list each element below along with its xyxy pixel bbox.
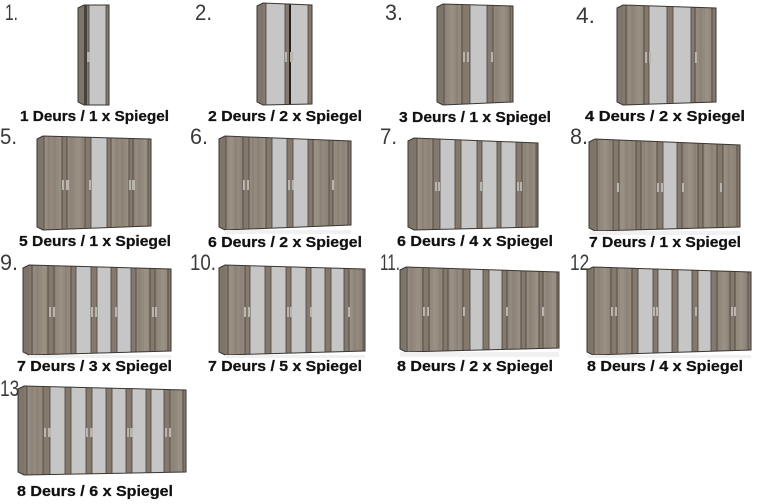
- icon: wardrobe 7 doors, 3 mirrors: [23, 260, 171, 360]
- icon: wardrobe 4 doors, 2 mirrors: [617, 0, 716, 110]
- panel: option 8: [570, 124, 741, 251]
- icon: wardrobe 2 doors, 2 mirrors: [257, 0, 312, 110]
- label 12: 8 Deurs / 4 x Spiegel: [587, 359, 743, 375]
- icon: wardrobe 1 door, 1 mirror: [78, 0, 109, 110]
- label 8: 7 Deurs / 1 x Spiegel: [589, 235, 741, 251]
- panel: option 4: [576, 0, 745, 125]
- label 7: 6 Deurs / 4 x Spiegel: [397, 234, 553, 250]
- panel: option 6: [190, 124, 362, 251]
- label 5: 5 Deurs / 1 x Spiegel: [19, 234, 171, 250]
- label 13: 8 Deurs / 6 x Spiegel: [17, 484, 173, 500]
- label 3: 3 Deurs / 1 x Spiegel: [399, 110, 551, 126]
- number 1: 1.: [5, 0, 18, 25]
- number 10: 10.: [190, 250, 216, 275]
- label 11: 8 Deurs / 2 x Spiegel: [397, 359, 553, 375]
- icon: wardrobe 5 doors, 1 mirror: [37, 130, 151, 235]
- panel: option 10: [190, 250, 365, 375]
- icon: wardrobe 6 doors, 4 mirrors: [408, 138, 538, 230]
- number 4: 4.: [576, 3, 595, 28]
- number 13: 13.: [0, 376, 24, 401]
- icon: wardrobe 8 doors, 6 mirrors: [18, 380, 186, 480]
- panel: option 3: [385, 0, 551, 126]
- panel: option 1: [5, 0, 169, 125]
- label 9: 7 Deurs / 3 x Spiegel: [17, 359, 172, 375]
- number 8: 8.: [570, 124, 588, 149]
- panel: option 11: [380, 250, 559, 375]
- panel: option 7: [380, 124, 553, 250]
- number 12: 12.: [570, 250, 594, 275]
- label 1: 1 Deurs / 1 x Spiegel: [20, 109, 169, 125]
- panel: option 13: [0, 376, 186, 500]
- number 6: 6.: [190, 124, 208, 149]
- icon: wardrobe 7 doors, 5 mirrors: [219, 260, 365, 360]
- number 3: 3.: [385, 0, 403, 25]
- label 4: 4 Deurs / 2 x Spiegel: [585, 109, 745, 125]
- icon: wardrobe 3 doors, 1 mirror: [437, 0, 513, 110]
- number 7: 7.: [380, 124, 397, 149]
- number 9: 9.: [0, 250, 18, 275]
- panel: option 5: [0, 124, 171, 250]
- number 5: 5.: [0, 124, 17, 149]
- icon: wardrobe 7 doors, 1 mirror: [589, 130, 740, 235]
- label 6: 6 Deurs / 2 x Spiegel: [208, 235, 362, 251]
- label 2: 2 Deurs / 2 x Spiegel: [208, 109, 362, 125]
- number 2: 2.: [195, 0, 212, 25]
- icon: wardrobe 8 doors, 2 mirrors: [400, 260, 559, 360]
- icon: wardrobe 8 doors, 4 mirrors: [587, 260, 751, 360]
- icon: wardrobe 6 doors, 2 mirrors: [219, 130, 351, 235]
- label 10: 7 Deurs / 5 x Spiegel: [208, 359, 362, 375]
- panel: option 12: [570, 250, 751, 375]
- panel: option 2: [195, 0, 362, 125]
- panel: option 9: [0, 250, 172, 375]
- number 11: 11.: [380, 250, 400, 275]
